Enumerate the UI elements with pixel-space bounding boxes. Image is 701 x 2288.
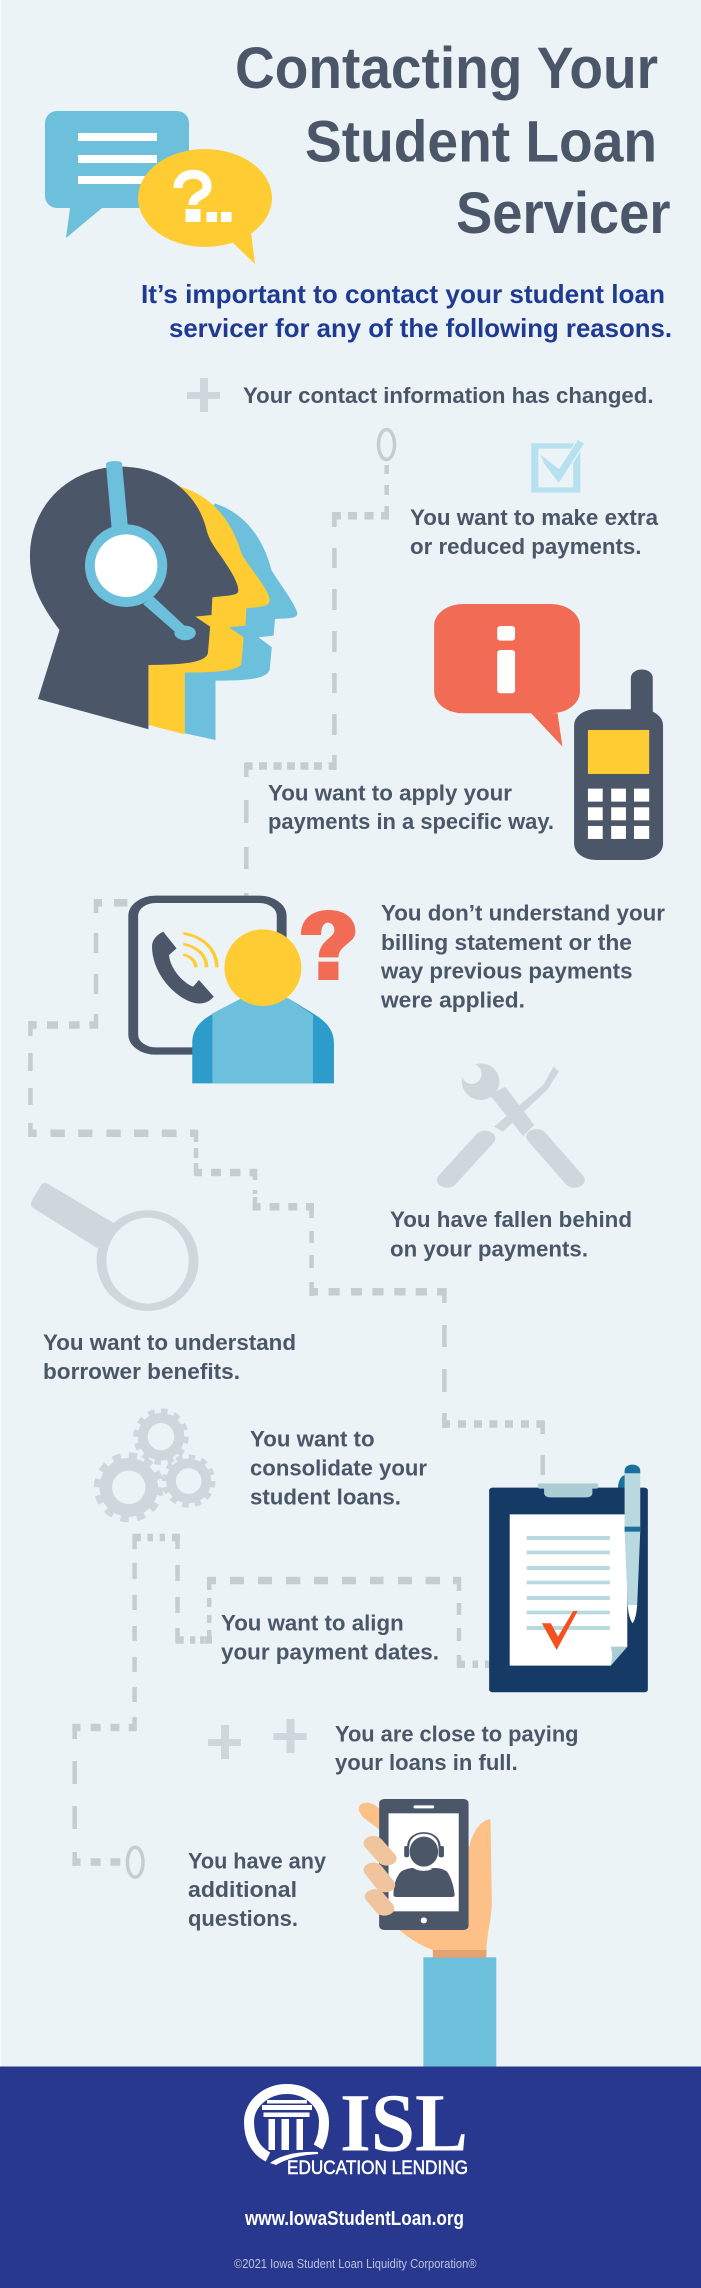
footer band (0, 2066, 701, 2288)
title: Contacting Your (235, 36, 658, 101)
dashed connector path: upper route (29, 430, 545, 1475)
icon: mobile phone (574, 670, 663, 860)
reason: fallen behind: You have fallen behind (390, 1207, 632, 1232)
reason: consolidate: consolidate your (250, 1456, 427, 1480)
icon: checkbox (535, 439, 585, 490)
icon: hand holding smartphone (359, 1799, 496, 2067)
icon: magnifying glass (31, 1183, 194, 1307)
subtitle: It’s important to contact your student loan (141, 279, 665, 309)
reason: close to paying: You are close to paying (335, 1722, 578, 1746)
subtitle (141, 279, 672, 343)
reason: extra or reduced payments: You want to make extra (410, 505, 659, 530)
reason: align dates (221, 1610, 439, 1664)
reason: close to paying (335, 1722, 578, 1775)
website URL: www.IowaStudentLoan.org (244, 2208, 464, 2230)
reason: consolidate: student loans. (250, 1484, 401, 1509)
icon: person with phone and question mark (133, 899, 355, 1083)
reason: extra or reduced payments: or reduced payments. (410, 534, 642, 559)
reason: apply payments: payments in a specific way. (268, 809, 554, 834)
subtitle: servicer for any of the following reasons. (169, 313, 672, 343)
icon: clipboard with pen (489, 1465, 648, 1692)
reason: billing statement: You don’t understand your (381, 900, 665, 926)
reason: billing statement: billing statement or the (381, 930, 632, 955)
reason: additional questions: You have any (188, 1848, 327, 1873)
icons: plus pair (208, 1719, 306, 1759)
reason: billing statement: were applied. (380, 988, 525, 1012)
reason: fallen behind: on your payments. (390, 1236, 588, 1262)
reason: consolidate: You want to (250, 1426, 375, 1452)
dashed connector path: lower route (72, 1534, 492, 1877)
title: Servicer (456, 181, 670, 246)
icon: heads with headset (30, 461, 297, 740)
reason: billing statement (380, 900, 665, 1012)
icon: chat bubbles (45, 111, 272, 264)
title (235, 36, 670, 246)
reason: borrower benefits: borrower benefits. (43, 1359, 240, 1384)
reason: additional questions: questions. (188, 1906, 298, 1931)
icon: wrench and screwdriver (447, 1063, 575, 1180)
copyright: ©2021 Iowa Student Loan Liquidity Corporation® (234, 2256, 477, 2271)
reason: apply payments: You want to apply your (268, 780, 512, 806)
reason: apply payments (268, 780, 554, 834)
reason: fallen behind (390, 1207, 632, 1262)
reason: close to paying: your loans in full. (335, 1750, 518, 1775)
reason: align dates: your payment dates. (221, 1639, 439, 1664)
reason: additional questions: additional (188, 1877, 297, 1902)
reason: borrower benefits: You want to understand (43, 1330, 296, 1355)
logo: ISL Education Lending (249, 2076, 468, 2179)
reason: borrower benefits (43, 1330, 296, 1384)
icon: gears (97, 1411, 213, 1519)
icon: plus (187, 378, 220, 412)
reason: extra or reduced payments (410, 505, 659, 559)
logo: ISL Education Lending: EDUCATION LENDING (287, 2158, 468, 2179)
reason: additional questions (188, 1848, 327, 1931)
reason: consolidate (250, 1426, 427, 1509)
logo: ISL Education Lending: ISL (340, 2076, 468, 2168)
reason: align dates: You want to align (221, 1610, 404, 1636)
title: Student Loan (305, 110, 657, 174)
icon: info bubble (434, 604, 580, 747)
reason: billing statement: way previous payments (380, 958, 632, 984)
reason: contact information: Your contact information has changed. (243, 383, 654, 408)
